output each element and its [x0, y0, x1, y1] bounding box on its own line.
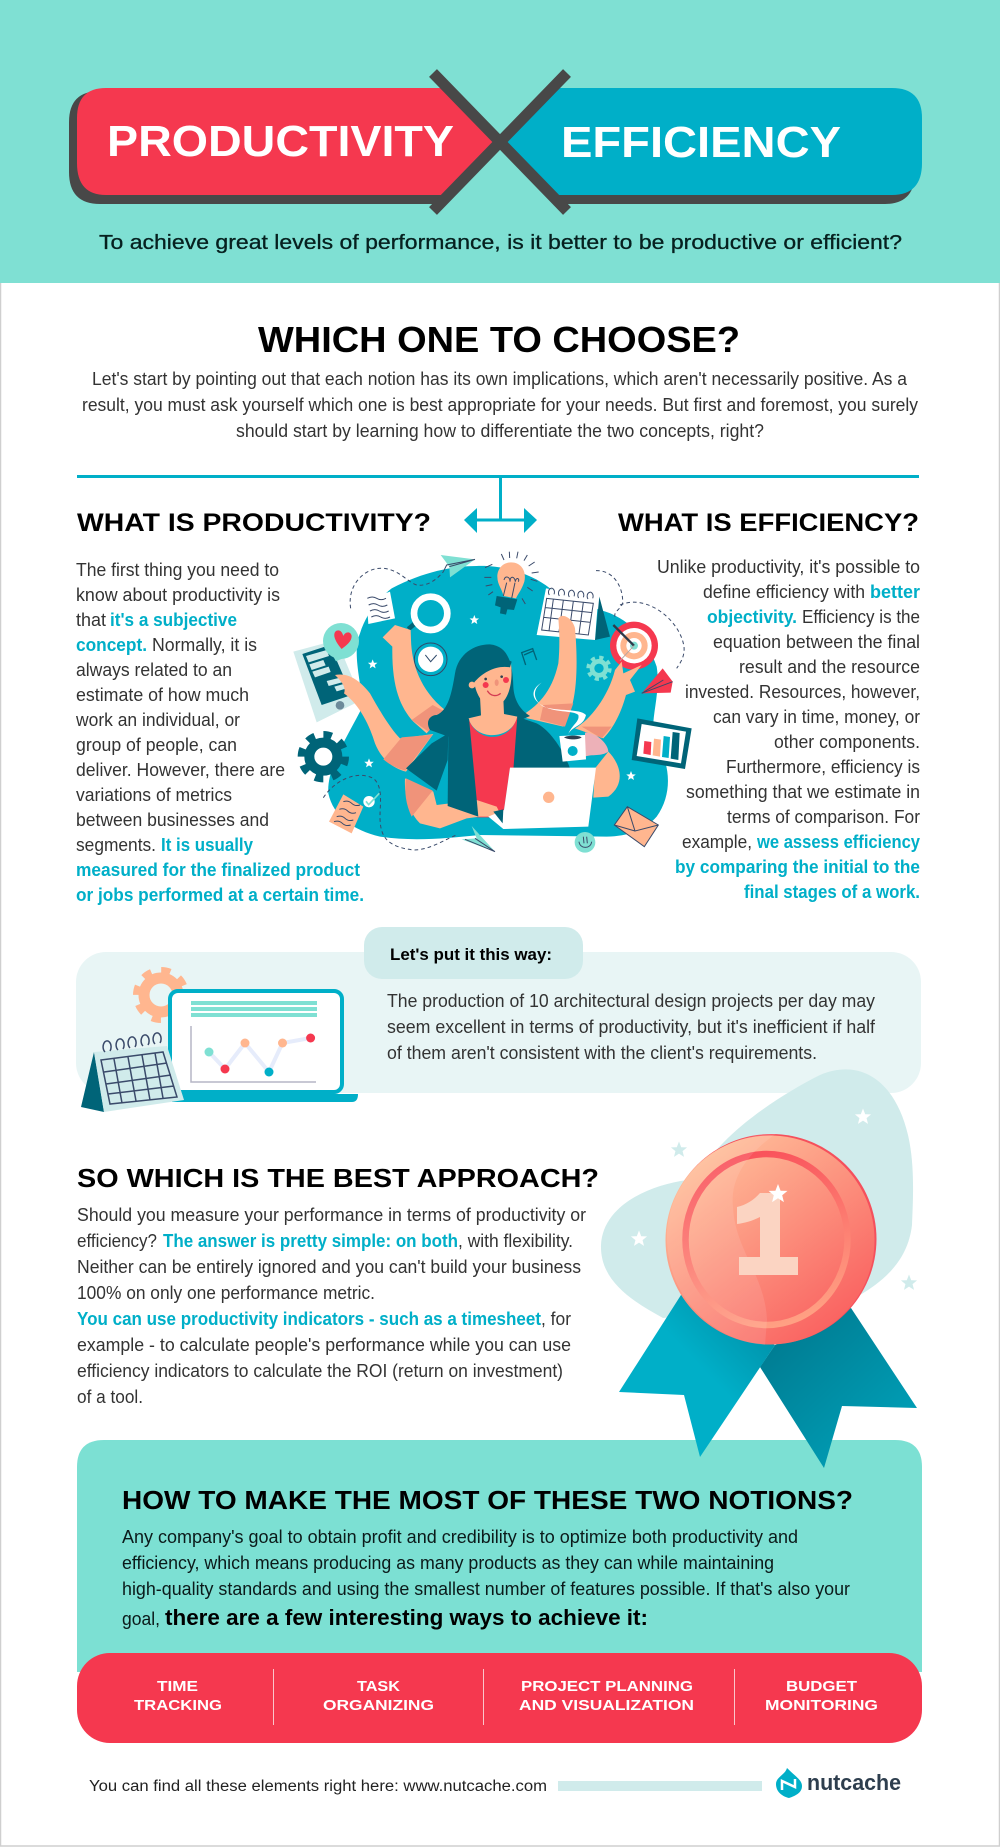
icon: desk calendar — [81, 1033, 184, 1112]
panel text: there are a few interesting ways to achieve it: — [165, 1605, 648, 1630]
versus cross — [433, 73, 567, 211]
icon: target — [610, 622, 658, 670]
text block: productivity: between businesses and — [76, 810, 269, 830]
text block: productivity: Normally, it is — [152, 635, 257, 655]
text block: efficiency: Efficiency is the — [802, 607, 920, 627]
callout text — [387, 991, 876, 1063]
dashed paths — [323, 568, 684, 850]
tool: project planning: AND VISUALIZATION — [519, 1697, 694, 1714]
productivity banner — [69, 88, 497, 204]
paper planes — [441, 555, 673, 852]
heading: what is efficiency: WHAT IS EFFICIENCY? — [618, 509, 919, 537]
heading: so which is the best approach: SO WHICH IS THE BEST APPROACH? — [77, 1163, 599, 1193]
text block: efficiency: terms of comparison. For — [727, 807, 920, 827]
icon: dark gear — [302, 735, 345, 778]
header band — [0, 0, 1000, 283]
panel text: efficiency, which means producing as many products as they can while maintaining — [122, 1553, 774, 1573]
subtitle: To achieve great levels of performance, is it better to be productive or efficient? — [99, 231, 902, 254]
text block: productivity — [75, 560, 364, 905]
laptop — [488, 768, 596, 829]
tool: budget monitoring: MONITORING — [765, 1697, 878, 1714]
panel heading: HOW TO MAKE THE MOST OF THESE TWO NOTIONS? — [122, 1487, 853, 1515]
text block: approach: Should you measure your performance in terms of productivity or — [77, 1205, 586, 1225]
text block: efficiency: invested. Resources, however, — [685, 682, 920, 702]
text block: approach: Neither can be entirely ignored and you can't build your business — [77, 1257, 581, 1277]
text block: efficiency: something that we estimate in — [686, 782, 920, 802]
text block: productivity: concept. — [76, 635, 147, 655]
text block: approach: You can use productivity indicators - such as a timesheet — [77, 1309, 541, 1329]
text block: efficiency: other components. — [774, 732, 920, 752]
blob behind medal — [601, 1069, 913, 1318]
heading: which one to choose: WHICH ONE TO CHOOSE? — [258, 319, 740, 360]
icon: sticky note with check — [329, 793, 379, 833]
icon: orange gear — [137, 971, 185, 1019]
medal — [666, 1133, 876, 1345]
woman: jacket — [406, 717, 570, 817]
text block: efficiency: Furthermore, efficiency is — [726, 757, 920, 777]
woman: right lower arm — [593, 752, 620, 798]
text block: productivity: measured for the finalized product — [76, 860, 360, 880]
woman: lower left arm — [405, 778, 502, 828]
tool: project planning: PROJECT PLANNING — [521, 1678, 693, 1695]
footer bar — [558, 1781, 762, 1791]
panel text: Any company's goal to obtain profit and credibility is to optimize both productivity and — [122, 1527, 798, 1547]
intro paragraph — [82, 369, 918, 441]
coffee mug with steam — [534, 683, 608, 762]
logo: nutcache — [776, 1768, 901, 1798]
stars around medal — [631, 1108, 917, 1290]
footer text: You can find all these elements right here: www.nutcache.com — [89, 1778, 547, 1795]
callout text: of them aren't consistent with the client's requirements. — [387, 1043, 817, 1063]
text block: efficiency: objectivity. — [707, 607, 797, 627]
panel text — [122, 1527, 850, 1630]
text block: productivity: variations of metrics — [76, 785, 232, 805]
text block: efficiency: we assess efficiency — [756, 832, 920, 852]
icon: smile badge — [575, 832, 595, 853]
icon: note paper — [367, 592, 395, 624]
icon: music note — [522, 649, 537, 665]
text block: efficiency: example, — [682, 832, 752, 852]
text block: productivity: It is usually — [161, 835, 253, 855]
text block: productivity: deliver. However, there are — [76, 760, 285, 780]
woman: hair — [428, 644, 530, 737]
woman: neck and top — [468, 697, 521, 817]
text block: approach: The answer is pretty simple: on both — [163, 1231, 458, 1251]
tool: time tracking — [134, 1678, 222, 1714]
tool: budget monitoring — [765, 1678, 878, 1714]
text block: productivity: segments. — [76, 835, 156, 855]
illustration: multitasking woman — [293, 552, 692, 853]
text block: efficiency — [657, 557, 920, 902]
callout tab: Let's put it this way: — [390, 945, 552, 964]
medal highlight — [667, 1133, 777, 1345]
text block: productivity: estimate of how much — [76, 685, 249, 705]
text block: productivity: or jobs performed at a certain time. — [76, 885, 364, 905]
icon: teal gear — [589, 658, 609, 679]
text block: productivity: group of people, can — [76, 735, 237, 755]
efficiency banner: EFFICIENCY — [561, 118, 841, 167]
tool: time tracking: TIME — [157, 1678, 198, 1695]
intro paragraph: should start by learning how to differentiate the two concepts, right? — [236, 421, 764, 441]
callout text: seem excellent in terms of productivity, but it's inefficient if half — [387, 1017, 876, 1037]
text block: efficiency: Unlike productivity, it's possible to — [657, 557, 920, 577]
blue blob background — [328, 566, 668, 839]
heading: what is productivity: WHAT IS PRODUCTIVITY? — [77, 509, 431, 537]
text block: efficiency: can vary in time, money, or — [713, 707, 920, 727]
text block: approach: 100% on only one performance metric. — [77, 1283, 375, 1303]
tool: task organizing — [323, 1678, 434, 1714]
stars — [364, 615, 636, 780]
divider with double arrow — [77, 475, 919, 533]
text block: approach: example - to calculate people's performance while you can use — [77, 1335, 571, 1355]
icon: envelope — [614, 807, 658, 847]
productivity banner: PRODUCTIVITY — [107, 117, 454, 166]
callout text: The production of 10 architectural design projects per day may — [387, 991, 875, 1011]
text block: efficiency: final stages of a work. — [744, 882, 920, 902]
callout tab — [364, 927, 583, 979]
text block: productivity: know about productivity is — [76, 585, 280, 605]
tools bar — [77, 1653, 922, 1743]
text block: efficiency: by comparing the initial to the — [675, 857, 920, 877]
text block: approach: , for — [541, 1309, 571, 1329]
logo: nutcache: nutcache — [807, 1770, 901, 1795]
woman: back arms — [335, 616, 642, 772]
woman: face — [468, 658, 512, 707]
tool: budget monitoring: BUDGET — [786, 1678, 857, 1695]
text block: productivity: The first thing you need to — [76, 560, 279, 580]
intro paragraph: result, you must ask yourself which one is best appropriate for your needs. But first and foremost, you surely — [82, 395, 918, 415]
icon: calendar — [537, 588, 610, 640]
text block: efficiency: result and the resource — [739, 657, 920, 677]
icon: phone with heart bubble — [293, 623, 362, 722]
text block: productivity: that — [76, 610, 106, 630]
icon: light bulb — [484, 552, 539, 615]
text block: approach: efficiency indicators to calculate the ROI (return on investment) — [77, 1361, 563, 1381]
text block: efficiency: equation between the final — [713, 632, 920, 652]
tool: time tracking: TRACKING — [134, 1697, 222, 1714]
icon: magnifier and clock — [408, 597, 447, 676]
text block: approach — [77, 1205, 586, 1407]
callout panel: let's put it this way — [76, 927, 921, 1112]
text block: approach: efficiency? — [77, 1231, 157, 1251]
medal number — [737, 1193, 798, 1275]
intro paragraph: Let's start by pointing out that each notion has its own implications, which aren't necessarily positive. As a — [92, 369, 908, 389]
icon: laptop with line chart — [170, 991, 358, 1102]
tool: task organizing: ORGANIZING — [323, 1697, 434, 1714]
icon: bar chart frame — [632, 718, 692, 769]
text block: approach: of a tool. — [77, 1387, 143, 1407]
text block: approach: , with flexibility. — [458, 1231, 573, 1251]
panel: how to make the most — [77, 1440, 922, 1672]
panel text: high-quality standards and using the smallest number of features possible. If that's also your — [122, 1579, 850, 1599]
text block: efficiency: define efficiency with — [703, 582, 865, 602]
text block: efficiency: better — [870, 582, 920, 602]
panel text: goal, — [122, 1609, 160, 1629]
text block: productivity: always related to an — [76, 660, 232, 680]
text block: productivity: it's a subjective — [110, 610, 237, 630]
text block: productivity: work an individual, or — [75, 710, 240, 730]
medal ribbons — [619, 1295, 917, 1468]
efficiency banner — [503, 88, 922, 204]
tool: project planning — [519, 1678, 694, 1714]
tool: task organizing: TASK — [357, 1678, 400, 1695]
